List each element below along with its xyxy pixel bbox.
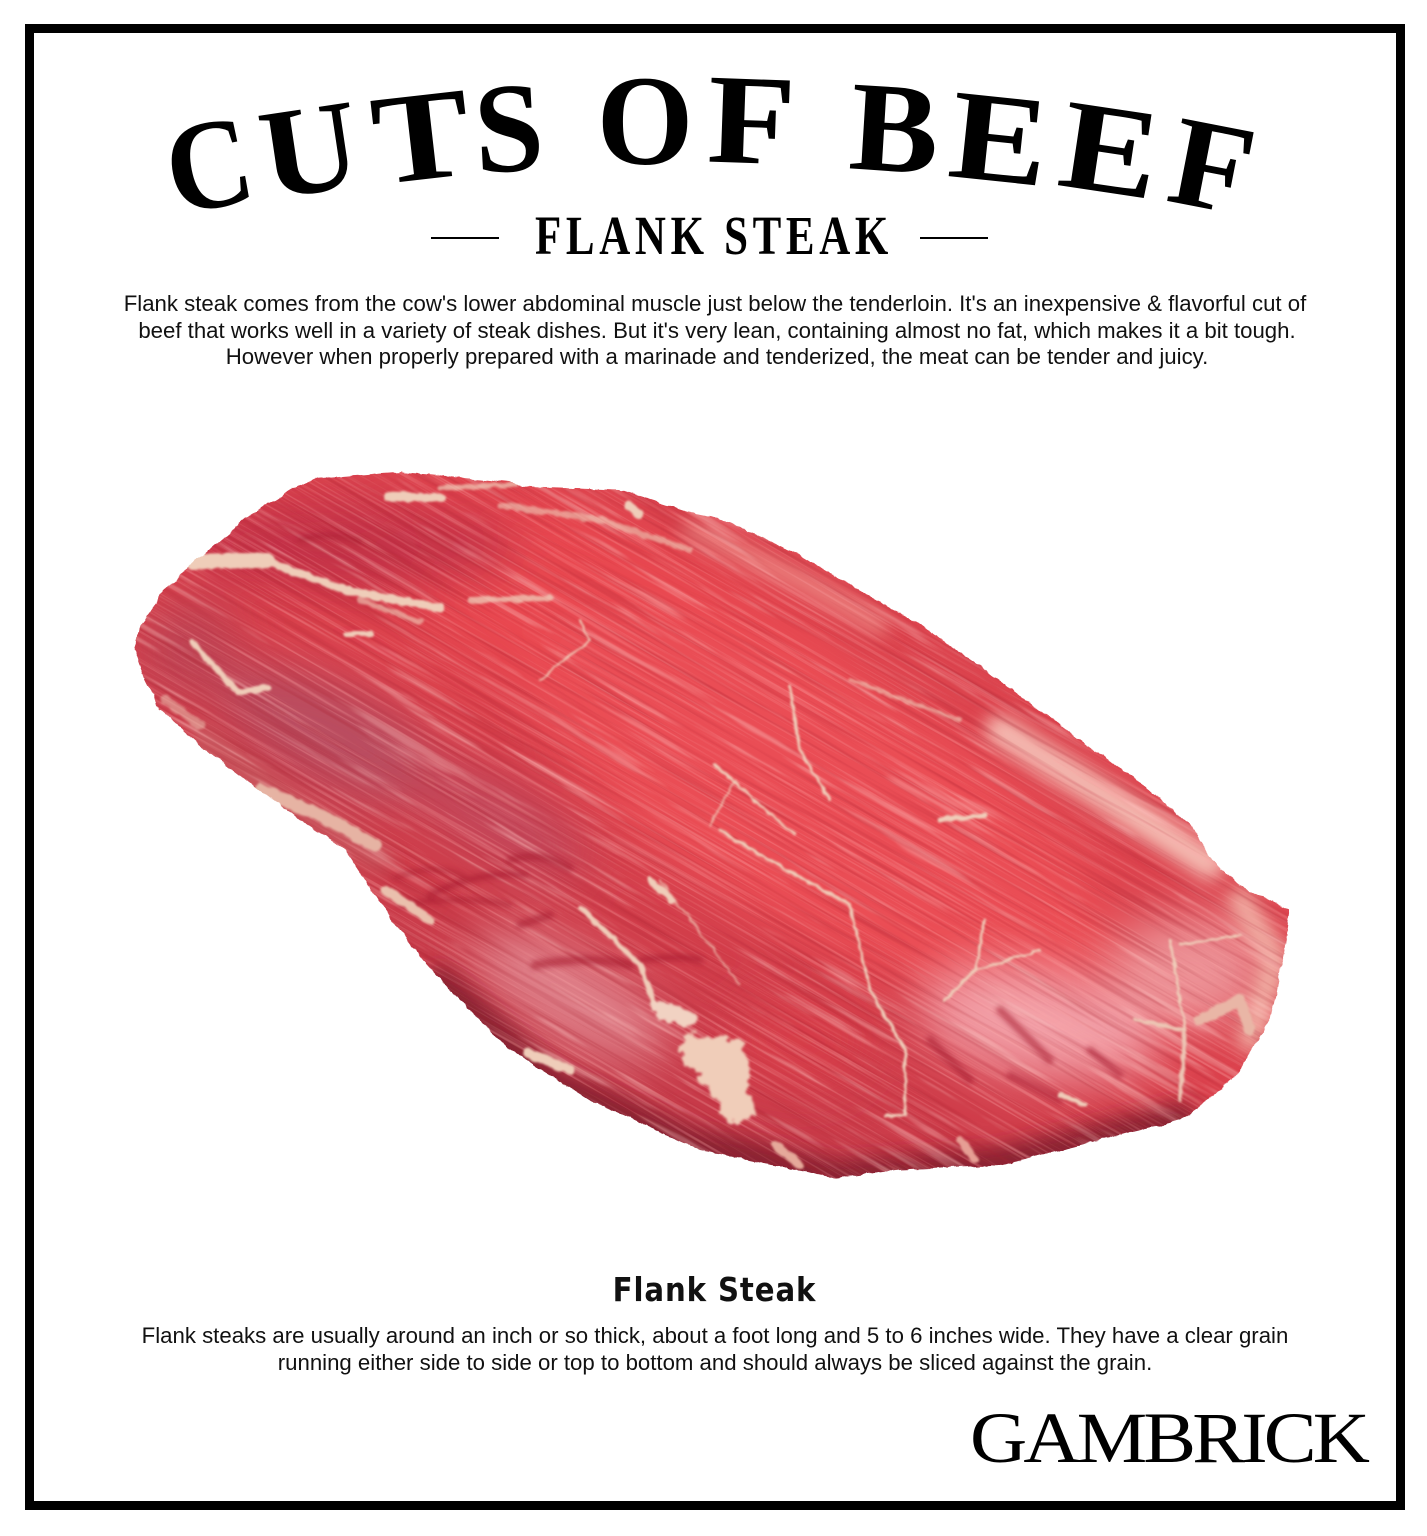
title: Cuts of Beef: [153, 49, 1265, 244]
marbling: [136, 476, 1286, 1178]
title: Cuts of Beef: B: [846, 56, 943, 202]
muscle grain: [148, 473, 1288, 1174]
dark creases: [300, 535, 1120, 1100]
image: flank steak: [134, 472, 1290, 1179]
intro text: [124, 291, 1306, 369]
intro text: beef that works well in a variety of steak dishes. But it's very lean, containing almost no fat, which makes it a bit tough.: [138, 318, 1296, 343]
intro text: Flank steak comes from the cow's lower abdominal muscle just below the tenderloin. It's an inexpensive & flavorful cut of: [124, 291, 1306, 316]
title: Cuts of Beef: E: [943, 62, 1056, 214]
large fat cap: [682, 1032, 758, 1124]
intro text: However when properly prepared with a marinade and tenderized, the meat can be tender and juicy.: [226, 344, 1208, 369]
title: Cuts of Beef: F: [1159, 90, 1265, 244]
fat and sinew: [165, 485, 1250, 1165]
title: Cuts of Beef: O: [597, 51, 693, 192]
subtitle: Flank Steak: FLANK STEAK: [535, 205, 893, 266]
description text: Flank steaks are usually around an inch or so thick, about a foot long and 5 to 6 inches wide. They have a clear grain: [142, 1323, 1288, 1348]
title: Cuts of Beef: F: [705, 49, 798, 193]
logo: Gambrick: GAMBRICK: [970, 1398, 1366, 1478]
title: Cuts of Beef: U: [251, 72, 369, 227]
title: Cuts of Beef: S: [471, 57, 547, 201]
heading: Flank Steak: Flank Steak: [613, 1270, 816, 1309]
title: Cuts of Beef: T: [365, 60, 478, 212]
title: Cuts of Beef: C: [153, 87, 264, 243]
artwork layer: [134, 78, 1290, 1179]
title: Cuts of Beef: E: [1051, 72, 1169, 227]
description text: running either side to side or top to bottom and should always be sliced against the grain.: [278, 1350, 1152, 1375]
description text: [142, 1323, 1288, 1375]
